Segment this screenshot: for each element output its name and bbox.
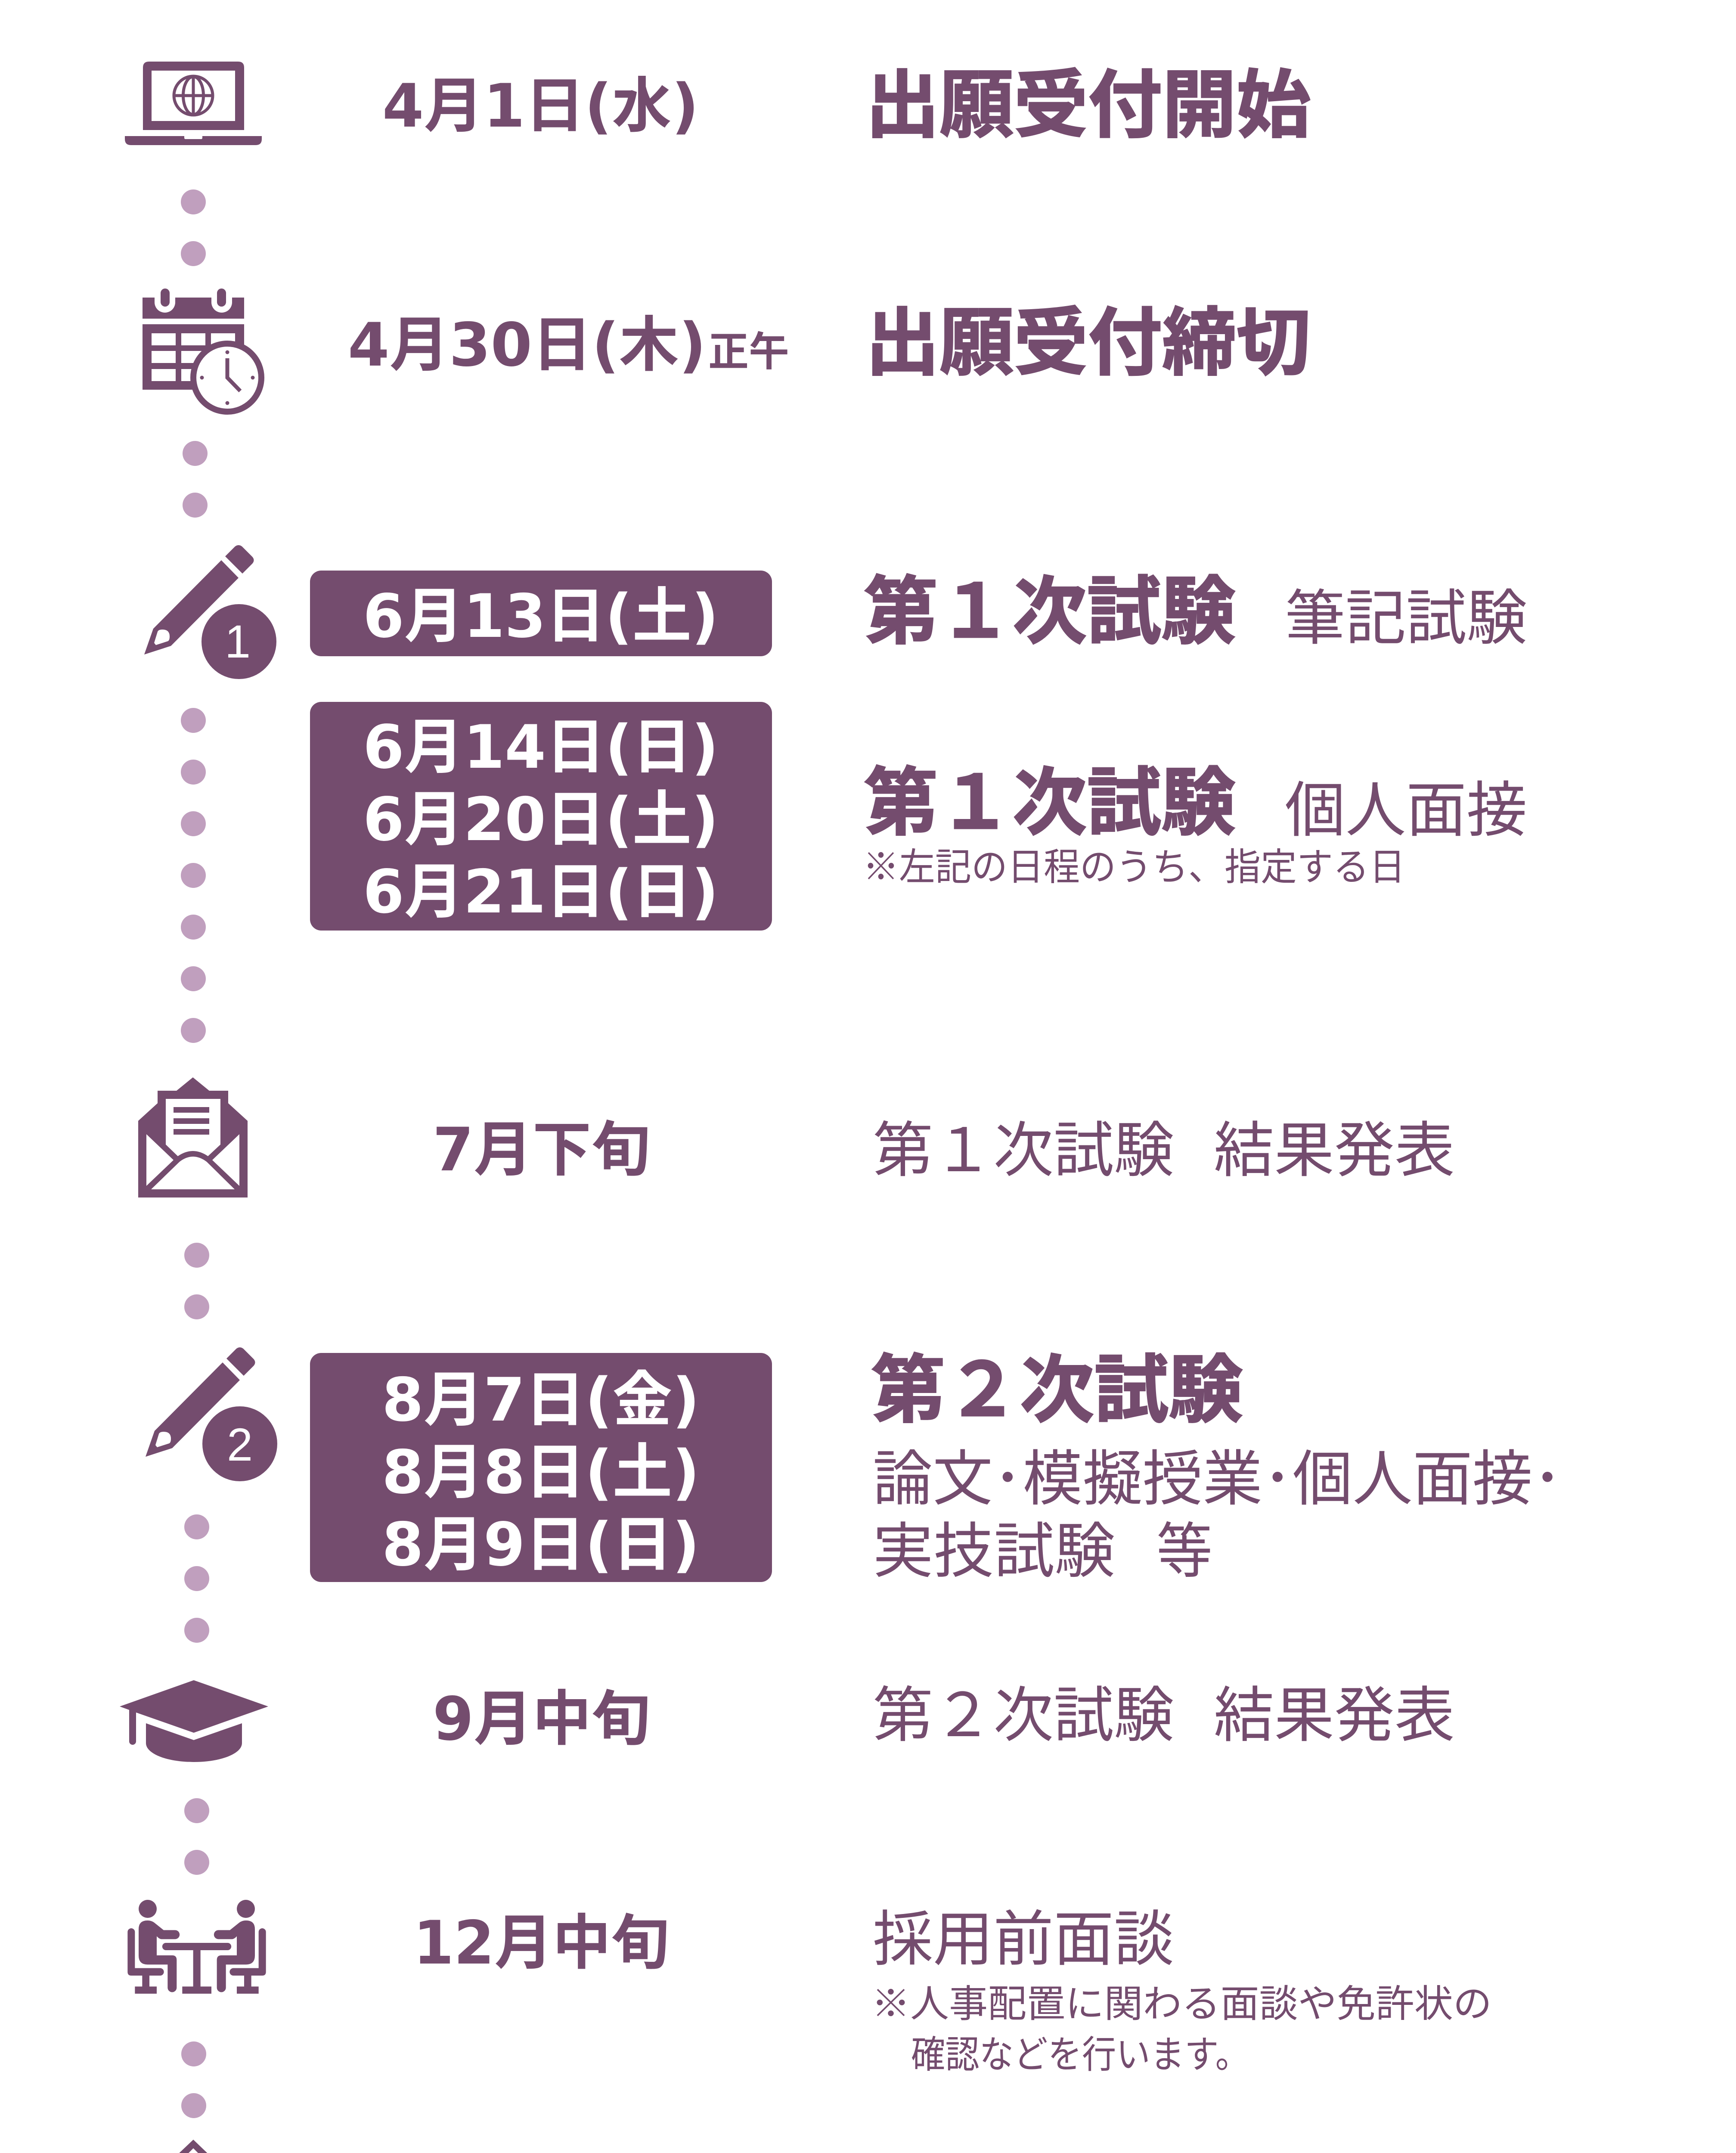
note: pre-employment interview details: [871, 1982, 1492, 2076]
date: second exam result: 9月中旬: [433, 1684, 650, 1754]
label: pre-employment interview: 採用前面談: [873, 1905, 1174, 1973]
date: application deadline: 4月30日(木): [348, 310, 706, 380]
text: second exam contents line 2: 実技試験: [873, 1517, 1115, 1585]
icon: interview at a table: [127, 1900, 266, 1994]
note: interview date: ※左記の日程のうち、指定する日: [863, 846, 1405, 888]
icon: pencil with number 1: [144, 545, 276, 679]
note: pre-employment interview details: 確認などを行います。: [911, 2033, 1249, 2076]
icon: pencil with number 1: 1: [225, 615, 251, 667]
date box: June 14, 20, 21: [310, 702, 772, 931]
date box: June 14, 20, 21: 6月14日(日): [363, 712, 719, 782]
label: first exam result: 結果発表: [1214, 1117, 1455, 1184]
text: second exam contents line 1: 論文･模擬授業･個人面接･: [873, 1445, 1562, 1513]
date box: June 14, 20, 21: 6月21日(日): [363, 857, 719, 927]
label: individual interview: 個人面接: [1285, 776, 1527, 844]
label: first exam result: 第１次試験: [873, 1117, 1174, 1184]
icon: open envelope: [138, 1077, 248, 1197]
icon: graduation cap: [120, 1680, 268, 1762]
label: written exam: 筆記試験: [1285, 584, 1527, 652]
icon: pencil with number 2: [146, 1347, 277, 1481]
label: second exam result: 第２次試験: [873, 1681, 1174, 1749]
timeline dots: [181, 189, 209, 2118]
note: pre-employment interview details: ※人事配置に関わる面談や免許状の: [871, 1982, 1492, 2025]
label: second exam result: 結果発表: [1214, 1681, 1455, 1749]
date box: August 7, 8, 9: [310, 1353, 772, 1582]
heading: application deadline: 出願受付締切: [865, 302, 1311, 385]
date: application start: 4月1日(水): [382, 71, 699, 141]
heading: first exam written: 第１次試験: [864, 571, 1236, 653]
heading: first exam interview: 第１次試験: [864, 762, 1236, 844]
date: first exam result: 7月下旬: [433, 1115, 650, 1185]
heading: second exam: 第２次試験: [871, 1349, 1243, 1432]
icon: laptop with globe: [125, 62, 262, 145]
date box: June 13: [310, 571, 772, 656]
date box: August 7, 8, 9: 8月7日(金): [382, 1365, 700, 1435]
icon: pencil with number 2: 2: [227, 1418, 253, 1470]
date: pre-employment interview: 12月中旬: [413, 1908, 669, 1978]
date box: August 7, 8, 9: 8月8日(土): [382, 1437, 700, 1507]
date box: June 13: 6月13日(土): [363, 581, 719, 651]
text: second exam contents line 2: 等: [1156, 1517, 1212, 1585]
icon: school building: [128, 2140, 259, 2153]
icon: calendar with clock: [143, 289, 261, 412]
date box: August 7, 8, 9: 8月9日(日): [382, 1510, 700, 1579]
date: application deadline: 正午: [708, 329, 789, 375]
heading: application start: 出願受付開始: [865, 64, 1311, 147]
date box: June 14, 20, 21: 6月20日(土): [363, 785, 719, 854]
